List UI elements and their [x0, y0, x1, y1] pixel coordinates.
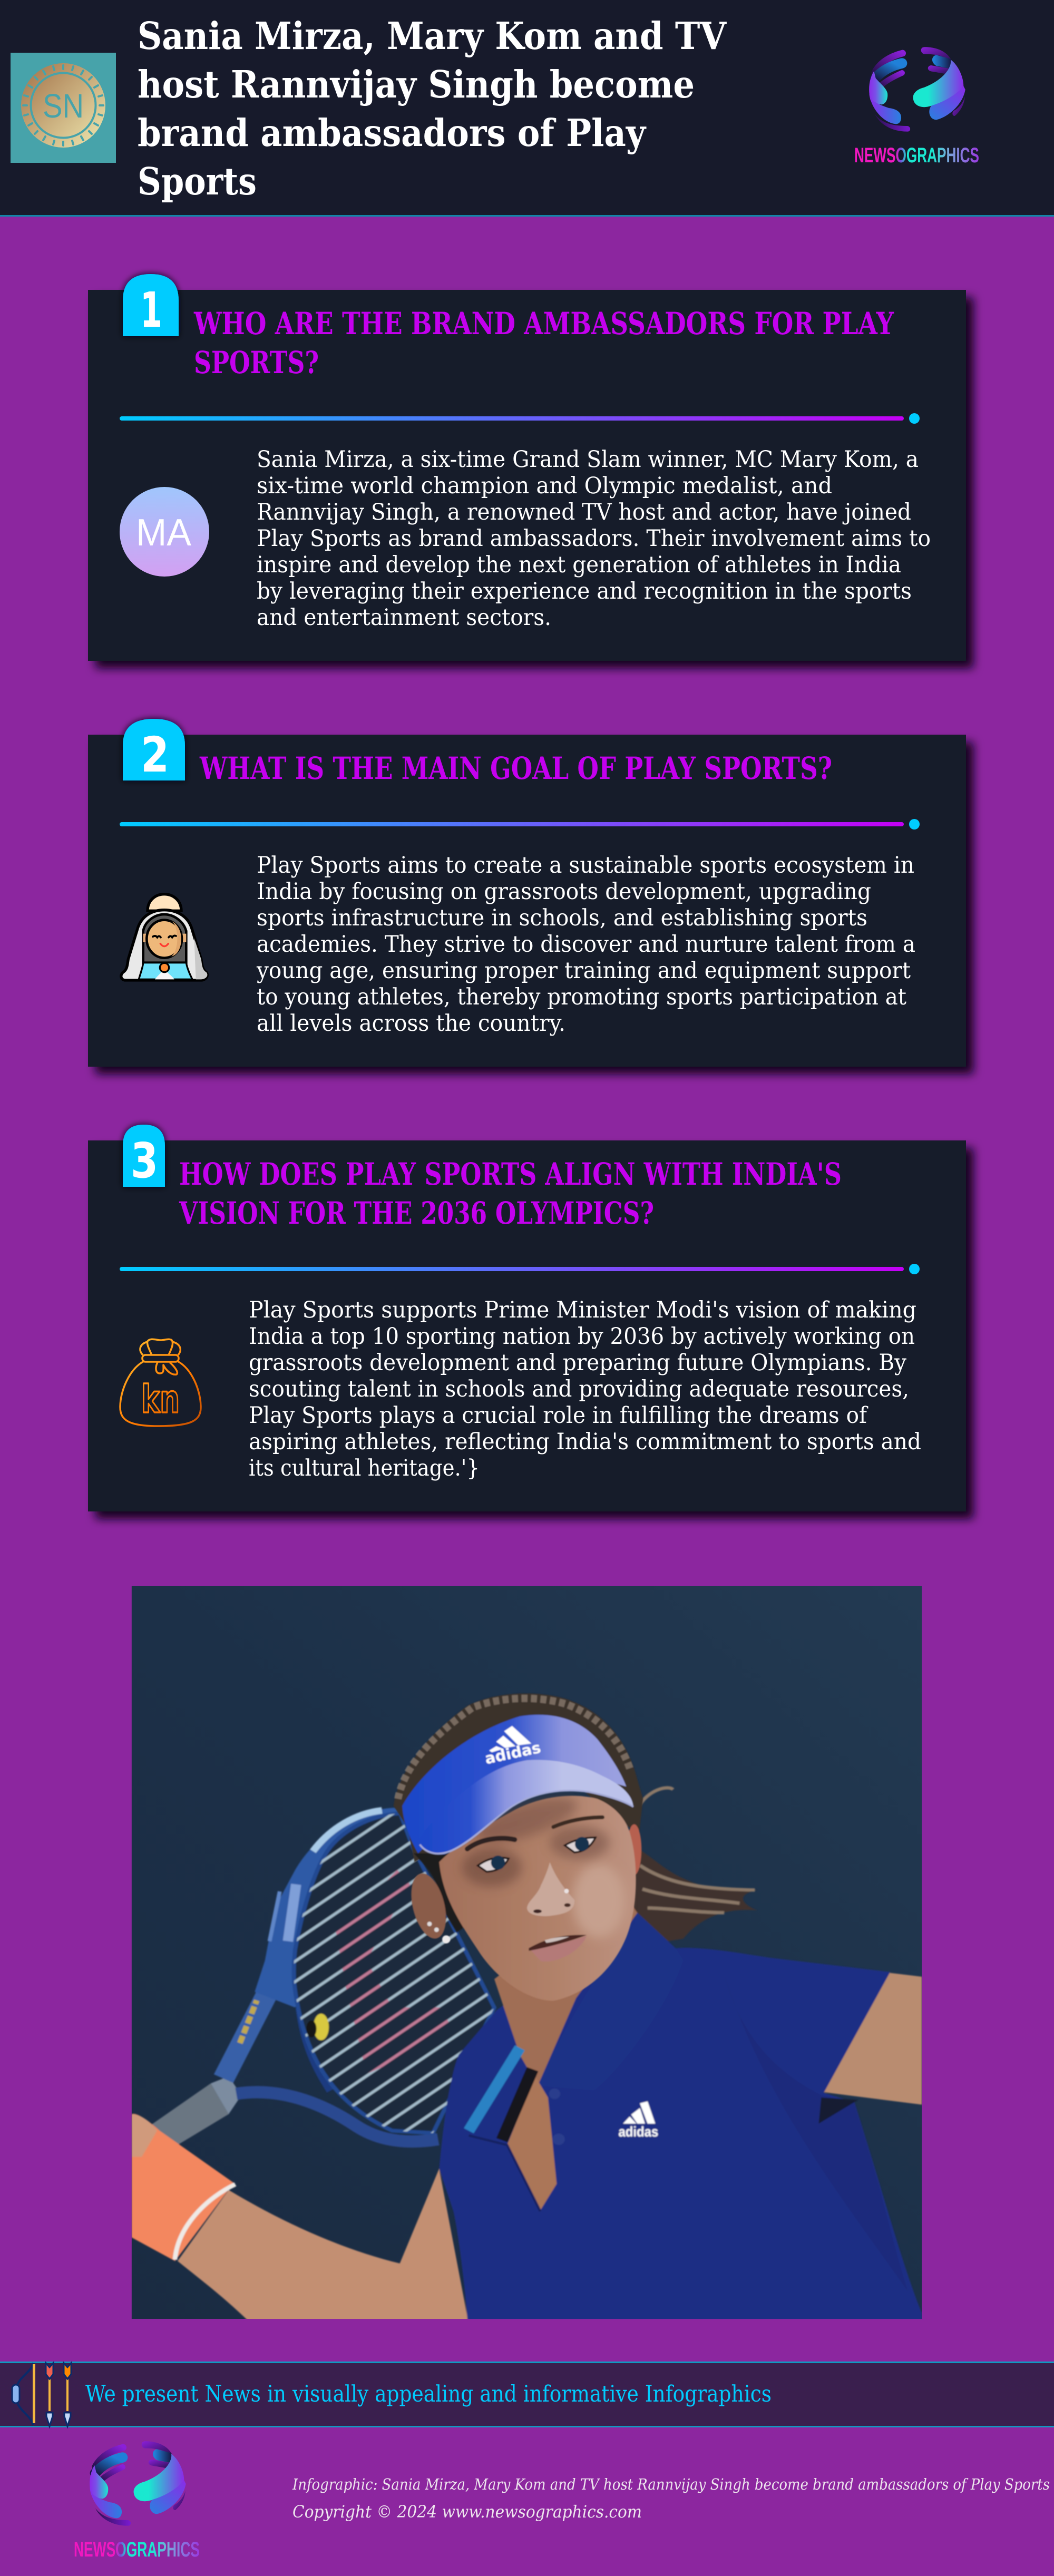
body text 1: [257, 446, 931, 631]
header bar: [0, 0, 1054, 217]
heading 2: WHAT IS THE MAIN GOAL OF PLAY SPORTS?: [199, 750, 832, 786]
logo: Newsographics header: [854, 47, 979, 167]
heading 3: VISION FOR THE 2036 OLYMPICS?: [179, 1195, 654, 1231]
title: brand ambassadors of Play: [138, 111, 647, 155]
body text 3: Play Sports plays a crucial role in fulfilling the dreams of: [249, 1402, 868, 1429]
left arm: [178, 2169, 469, 2324]
body text 2: India by focusing on grassroots development, upgrading: [257, 879, 871, 905]
title: Sania Mirza, Mary Kom and TV: [138, 14, 727, 58]
icon: SN badge logo: [11, 53, 116, 163]
earrings: [427, 1921, 432, 1926]
head and visor: [394, 1693, 643, 2001]
footer band: [0, 2362, 1054, 2427]
hair right wisps: [632, 1847, 757, 1941]
title: Sports: [138, 159, 257, 203]
body text 3: its cultural heritage.'}: [249, 1455, 480, 1481]
heading 1: WHO ARE THE BRAND AMBASSADORS FOR PLAY: [193, 306, 894, 341]
footer credit: [292, 2475, 1050, 2522]
logo: Newsographics header: NEWSOGRAPHICS: [854, 144, 979, 167]
icon: veiled woman: [121, 894, 207, 980]
tagline: We present News in visually appealing and informative Infographics: [85, 2381, 772, 2407]
photo: tennis player: [132, 1586, 922, 2336]
body text 3: [249, 1297, 921, 1481]
body text 2: young age, ensuring proper training and equipment support: [256, 958, 911, 984]
shirt: [439, 1913, 922, 2324]
body text 1: and entertainment sectors.: [257, 604, 551, 631]
body text 2: academies. They strive to discover and nurture talent from a: [257, 931, 915, 958]
body text 2: Play Sports aims to create a sustainable sports ecosystem in: [257, 852, 914, 879]
body text 1: six-time world champion and Olympic medalist, and: [257, 473, 832, 499]
body text 3: India a top 10 sporting nation by 2036 by actively working on: [249, 1323, 915, 1350]
body text 3: aspiring athletes, reflecting India's commitment to sports and: [249, 1429, 921, 1455]
heading 3: [179, 1156, 842, 1231]
neck and chest: [493, 1907, 638, 2083]
panel: question 2: [88, 719, 966, 1067]
icon: SN badge logo: SN: [43, 87, 84, 125]
title: [138, 14, 727, 203]
body text 3: Play Sports supports Prime Minister Modi's vision of making: [249, 1297, 916, 1323]
body text 2: to young athletes, thereby promoting sports participation at: [257, 984, 906, 1010]
logo: Newsographics footer: [74, 2441, 200, 2561]
icon: MA avatar: MA: [136, 512, 191, 554]
title: host Rannvijay Singh become: [138, 62, 695, 106]
body text 2: [256, 852, 915, 1037]
icon: money bag: kn: [141, 1377, 180, 1421]
number badge 1: [123, 274, 179, 338]
body text 1: Rannvijay Singh, a renowned TV host and actor, have joined: [257, 499, 911, 525]
body text 2: all levels across the country.: [257, 1010, 565, 1037]
number badge 3: 3: [131, 1133, 158, 1189]
heading 3: HOW DOES PLAY SPORTS ALIGN WITH INDIA'S: [179, 1156, 842, 1192]
body text 1: Sania Mirza, a six-time Grand Slam winner, MC Mary Kom, a: [257, 446, 919, 473]
number badge 1: 1: [140, 282, 162, 338]
logo: Newsographics footer: NEWSOGRAPHICS: [74, 2538, 200, 2561]
ear: [405, 1870, 452, 1942]
footer credit: Copyright © 2024 www.newsographics.com: [292, 2502, 642, 2522]
body text 1: Play Sports as brand ambassadors. Their involvement aims to: [257, 525, 931, 552]
mouth: [531, 1936, 587, 1962]
body text 1: inspire and develop the next generation of athletes in India: [257, 552, 901, 578]
body text 1: by leveraging their experience and recognition in the sports: [257, 578, 912, 604]
number badge 2: [123, 719, 185, 783]
body text 3: scouting talent in schools and providing adequate resources,: [249, 1376, 909, 1402]
number badge 2: 2: [141, 727, 169, 783]
shirt logo: [623, 2101, 655, 2124]
hair: [394, 1693, 643, 1862]
visor: [402, 1715, 626, 1853]
eyes and brows: [467, 1838, 515, 1849]
body text 3: grassroots development and preparing future Olympians. By: [249, 1350, 907, 1376]
panel: question 3: [88, 1125, 966, 1511]
face base: [439, 1796, 636, 2001]
photo: tennis player: adidas: [619, 2124, 658, 2140]
right arm: [821, 1972, 922, 2105]
heading 1: SPORTS?: [194, 345, 319, 380]
head and visor: adidas: [483, 1739, 542, 1768]
panel: question 1: [88, 274, 966, 661]
heading 1: [193, 306, 894, 380]
icon: bow and arrows: [12, 2363, 71, 2426]
body text 2: sports infrastructure in schools, and establishing sports: [257, 905, 867, 931]
icon: MA avatar: [120, 487, 209, 577]
icon: money bag: [120, 1339, 201, 1426]
nose: [527, 1862, 574, 1916]
racket: [150, 2083, 229, 2145]
